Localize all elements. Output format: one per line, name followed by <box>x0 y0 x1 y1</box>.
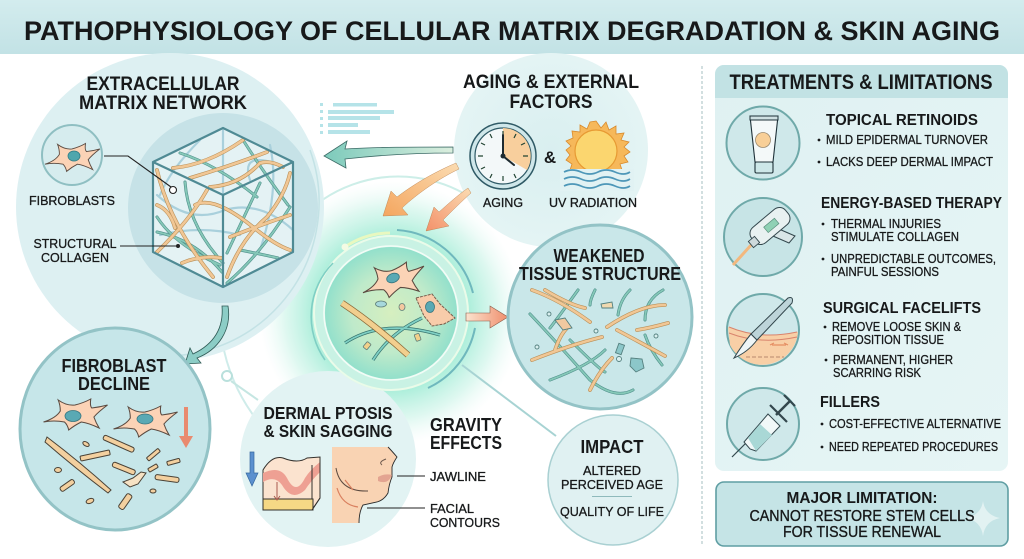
title banner <box>0 0 1024 54</box>
icon: collagen cube <box>153 128 293 287</box>
treatment: energy-based therapy <box>724 195 1003 279</box>
label: structural collagen: COLLAGEN <box>41 250 109 265</box>
label: fibroblasts: FIBROBLASTS <box>29 193 115 208</box>
icon: scalpel <box>727 294 799 366</box>
icon: energy device <box>724 198 802 276</box>
divider <box>701 66 703 546</box>
panel header <box>715 65 1008 98</box>
bullets: LACKS DEEP DERMAL IMPACT <box>826 154 993 169</box>
arrow: aging to center 1 <box>383 163 459 216</box>
panel: extracellular matrix network <box>16 53 324 361</box>
text: altered perceived age: PERCEIVED AGE <box>561 477 663 492</box>
fibers <box>342 303 440 360</box>
heading: fillers: FILLERS <box>820 394 880 411</box>
panel: fibroblast decline <box>20 328 210 530</box>
heading: aging: AGING & EXTERNAL <box>463 72 639 93</box>
bullets <box>824 319 961 380</box>
bullets: SCARRING RISK <box>833 365 921 380</box>
heading: weakened <box>519 246 681 284</box>
callout: major limitation: CANNOT RESTORE STEM CELLS <box>750 508 974 525</box>
heading: energy-based therapy: ENERGY-BASED THERAPY <box>821 195 1003 212</box>
leader lines <box>104 156 180 248</box>
heading: aging <box>463 72 639 113</box>
heading: impact: IMPACT <box>580 437 644 457</box>
leader lines: gravity <box>367 476 425 508</box>
callout: major limitation: FOR TISSUE RENEWAL <box>783 524 941 541</box>
callout: major limitation <box>716 482 1008 546</box>
central glow and faint rings <box>222 176 523 466</box>
label: facial contours: CONTOURS <box>430 515 500 530</box>
debris <box>363 301 421 350</box>
arrow: decline <box>179 407 193 448</box>
ampersand: & <box>544 148 556 167</box>
text: altered perceived age <box>561 463 663 492</box>
icon: cream tube <box>726 106 800 180</box>
heading: dermal ptosis <box>264 403 392 441</box>
callout: major limitation: MAJOR LIMITATION: <box>786 490 938 507</box>
heading: weakened: WEAKENED <box>554 246 644 266</box>
heading: dermal ptosis: DERMAL PTOSIS <box>264 403 392 423</box>
debris <box>535 302 658 372</box>
panel: aging and external factors <box>454 53 648 247</box>
connector to impact <box>462 365 556 436</box>
heading: gravity effects <box>430 415 502 453</box>
heading: fibroblast decline <box>62 356 166 394</box>
label: structural collagen <box>34 236 116 265</box>
heading: topical retinoids: TOPICAL RETINOIDS <box>826 112 978 129</box>
panel: treatments and limitations <box>715 65 1008 471</box>
title banner: PATHOPHYSIOLOGY OF CELLULAR MATRIX DEGRADATION & SKIN AGING <box>24 16 1000 46</box>
panel: central cellular damage <box>311 230 475 391</box>
panel: impact <box>548 415 678 545</box>
heading: dermal ptosis: & SKIN SAGGING <box>264 421 392 441</box>
heading: ECM: MATRIX NETWORK <box>79 93 247 114</box>
icon: fibroblast cell <box>44 399 108 430</box>
label: facial contours: FACIAL <box>430 501 474 516</box>
icon: blue down arrow <box>246 452 258 486</box>
decorative data bars <box>320 103 394 134</box>
label: structural collagen: STRUCTURAL <box>34 236 116 251</box>
treatment: fillers <box>727 388 1001 460</box>
icon: damaged fibroblast <box>416 294 455 326</box>
arrow: matrix to fibroblast decline <box>185 306 229 364</box>
bullets: PAINFUL SESSIONS <box>831 264 939 279</box>
heading: surgical facelifts: SURGICAL FACELIFTS <box>823 300 981 317</box>
label: aging: AGING <box>483 195 523 210</box>
label: jawline: JAWLINE <box>430 469 486 484</box>
text: quality of life: QUALITY OF LIFE <box>560 504 664 519</box>
panel: dermal ptosis and skin sagging <box>240 371 425 547</box>
heading: weakened: TISSUE STRUCTURE <box>519 264 681 284</box>
heading: fibroblast decline: DECLINE <box>78 374 150 394</box>
icon: face profile <box>332 447 397 523</box>
arrow: aging to matrix <box>324 141 453 168</box>
bullets <box>822 216 996 279</box>
icon: sun over waves <box>560 121 634 191</box>
broken fibers <box>530 290 668 393</box>
treatment: surgical facelifts <box>727 294 981 380</box>
bullets: UNPREDICTABLE OUTCOMES, <box>831 251 996 266</box>
arrow: aging to center 2 <box>426 188 471 231</box>
icon: clock <box>470 123 536 189</box>
bullets: STIMULATE COLLAGEN <box>831 229 959 244</box>
bullets: REPOSITION TISSUE <box>832 332 944 347</box>
icon: healthy fibroblast <box>360 260 428 301</box>
heading: aging: FACTORS <box>510 92 592 113</box>
bullets: THERMAL INJURIES <box>831 216 941 231</box>
bullets <box>821 416 1001 454</box>
bullets: REMOVE LOOSE SKIN & <box>832 319 961 334</box>
heading: fibroblast decline: FIBROBLAST <box>62 356 166 376</box>
heading: ECM: EXTRACELLULAR <box>86 74 240 95</box>
heading: gravity effects: GRAVITY <box>430 415 502 435</box>
bullets <box>818 132 993 169</box>
heading: gravity effects: EFFECTS <box>430 433 502 453</box>
treatment: topical retinoids <box>726 106 993 180</box>
bullets: MILD EPIDERMAL TURNOVER <box>826 132 988 147</box>
icon: syringe <box>727 388 799 460</box>
panel header: TREATMENTS & LIMITATIONS <box>730 71 992 94</box>
panel: weakened tissue structure <box>508 225 692 409</box>
heading: ECM <box>79 74 247 114</box>
label: facial contours <box>430 501 500 530</box>
icon: fibroblast circle <box>42 125 102 185</box>
arrow: center to weakened tissue <box>466 306 508 328</box>
collagen fragments <box>45 435 180 510</box>
text: altered perceived age: ALTERED <box>583 463 641 478</box>
label: UV radiation: UV RADIATION <box>549 195 637 210</box>
bullets: PERMANENT, HIGHER <box>833 352 953 367</box>
icon: fibroblast cell <box>114 406 178 437</box>
icon: skin layers block <box>263 457 320 510</box>
